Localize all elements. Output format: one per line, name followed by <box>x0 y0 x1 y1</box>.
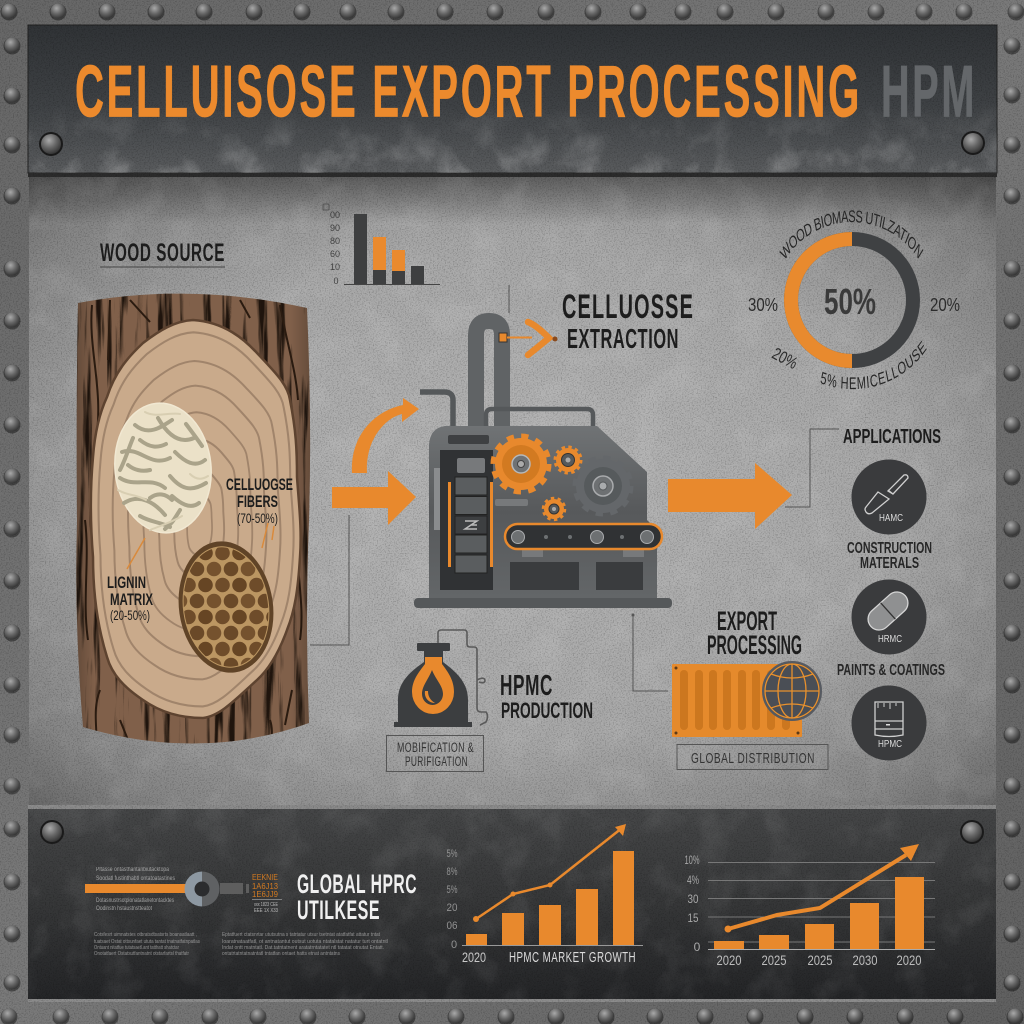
chart: forecast growth: 4% <box>687 873 699 887</box>
chart: HPMC market growth: 8% <box>446 866 458 878</box>
globe <box>763 662 821 720</box>
donut chart: wood biomass utilization <box>748 210 960 390</box>
box: modification and purification: MOBIFICATION & <box>397 740 474 755</box>
donut chart: wood biomass utilization: 5% HEMICELLOUSE <box>820 340 927 390</box>
connector: machine to applications <box>785 429 839 507</box>
application: paint bucket <box>852 686 926 760</box>
machine body <box>429 426 657 598</box>
tiny orange gear <box>543 498 565 520</box>
arrow: curved feed <box>352 398 419 473</box>
label: lignin matrix <box>107 538 153 623</box>
header panel <box>28 25 997 173</box>
label: construction materials: MATERALS <box>860 555 919 572</box>
footer: small gauge captions: Oodinstn hstaustnstteatot <box>96 906 152 912</box>
heading: cellulose extraction <box>562 288 694 354</box>
heading: HPMC production <box>500 670 593 723</box>
heading: HPMC production: PRODUCTION <box>501 698 593 723</box>
footer: small gauge captions <box>96 867 175 912</box>
application: paint bucket: HPMC <box>878 739 902 750</box>
heading: wood source: WOOD SOURCE <box>100 239 225 267</box>
donut chart: wood biomass utilization: 30% <box>748 295 778 315</box>
heading: cellulose extraction: CELLUOSSE <box>562 288 694 326</box>
pipes <box>420 321 593 428</box>
footer: fine print right: Indat ontt matntatl. Dat.tatntatnent aratatrntatatet ntl tatatat otnutat Entatt. <box>222 945 384 951</box>
small bar chart: 60 <box>330 249 340 259</box>
footer: fine print left: Ontuant nitatfue tutatsaetl.ant tatthatt shatctar <box>94 945 179 951</box>
chart: HPMC market growth: 0 <box>451 939 457 951</box>
footer: utilisation gauge bar: EEKNIE <box>252 873 278 882</box>
label: cellulose fibers: FIBERS <box>237 492 278 511</box>
footer: fine print left: tuatsaet Ostat ottsunfaet ututa tantat tnatnatfatnpatlas <box>94 939 200 945</box>
chart: forecast growth <box>684 844 935 968</box>
chart: HPMC market growth <box>446 824 643 966</box>
chart: HPMC market growth: 20 <box>446 902 458 914</box>
chart: forecast growth: 2025 <box>762 952 787 968</box>
heading: cellulose extraction: EXTRACTION <box>567 323 679 354</box>
chart: forecast growth: 15 <box>688 911 699 925</box>
small bar chart: 10 <box>330 262 340 272</box>
arrow: wood to machine <box>332 471 416 525</box>
small bar chart: 00 <box>330 210 340 220</box>
connector: trunk to process <box>310 515 349 645</box>
cellulose extraction machine <box>414 321 672 608</box>
footer: fine print right: ontatrtatntatnatntatl tntatfan ontaet hatts etnat antntatns <box>222 951 340 957</box>
application: construction materials <box>852 460 926 534</box>
conveyor belt <box>505 524 662 557</box>
label: lignin matrix: LIGNIN <box>107 573 146 592</box>
box: modification and purification: PURIFIGATION <box>405 754 468 769</box>
footer: small gauge captions: Dotasnustrsotplonatatlanetontacktes <box>96 898 174 904</box>
box: global distribution <box>677 744 828 770</box>
footer: utilisation gauge bar: 1E6JJ9 <box>252 890 279 899</box>
footer: fine print left <box>94 932 200 957</box>
wood trunk cross-section <box>76 294 310 744</box>
footer: fine print left: Onotatfaert Ostatsutfantnatnt otstarfartsl thatfatr <box>94 951 189 957</box>
chart: forecast growth: 2020 <box>716 952 742 968</box>
application: paints and coatings pill: HRMC <box>878 634 902 645</box>
box: global distribution: GLOBAL DISTRIBUTION <box>691 750 815 767</box>
footer: fine print left: Cotsfesrt uimnatstes otbratsdtsatsrts boansatlaatt , <box>94 932 197 938</box>
label: construction materials: CONSTRUCTION <box>847 540 932 557</box>
base windows <box>510 562 579 590</box>
chart: forecast growth: 2030 <box>852 952 878 968</box>
heading: export processing <box>707 606 802 660</box>
footer: utilisation gauge bar: xxx 1823 CEE <box>254 902 278 908</box>
footer: small gauge captions: Soodatl fustinthabtl ontatoatastines <box>96 876 175 882</box>
gray gear <box>575 458 631 514</box>
footer: fine print right <box>222 932 388 957</box>
footer: small gauge captions: Pltasse ontasthantanbiutacktopa <box>96 867 170 873</box>
donut chart: wood biomass utilization: 20% <box>769 344 801 373</box>
box: modification and purification <box>386 736 484 772</box>
footer: utilisation gauge bar: EEE 1X X33 <box>254 908 278 914</box>
footer: fine print right: Ioaratnataatfatl, ot antnatantut outsut uotuta ntatalstat natatur turt ontatntl <box>222 939 388 945</box>
footer: utilisation gauge bar: 1A6J13 <box>252 882 279 891</box>
label: lignin matrix: (20-50%) <box>110 607 150 623</box>
chart: forecast growth: 30 <box>688 892 699 906</box>
footer heading: global hprc utilkese <box>297 869 417 925</box>
small bar chart: 90 <box>330 223 340 233</box>
icon: shipping container with globe <box>672 662 821 737</box>
label: cellulose fibers <box>226 475 293 548</box>
application: construction materials: HAMC <box>879 513 903 524</box>
footer heading: global hprc utilkese: GLOBAL HPRC <box>297 869 417 899</box>
extraction outlet icon <box>499 285 558 355</box>
chart: HPMC market growth: 5% <box>446 848 458 860</box>
chart: HPMC market growth: 5% <box>446 884 458 896</box>
label: cellulose fibers: (70-50%) <box>237 510 278 526</box>
small bar chart: 0 <box>333 276 339 286</box>
label: cellulose fibers: CELLUOGSE <box>226 475 293 494</box>
footer heading: global hprc utilkese: UTILKESE <box>297 895 380 925</box>
large orange gear <box>493 436 549 492</box>
application: paints and coatings pill <box>852 580 926 654</box>
label: construction materials <box>847 540 932 572</box>
lignin honeycomb oval <box>178 541 274 673</box>
chart: forecast growth: 2020 <box>896 952 922 968</box>
heading: export processing: PROCESSING <box>707 630 802 660</box>
small bar chart <box>323 204 440 286</box>
label: lignin matrix: MATRIX <box>110 590 153 609</box>
main concrete panel <box>29 174 996 806</box>
chart: forecast growth: 2025 <box>808 952 833 968</box>
donut chart: wood biomass utilization: 20% <box>930 295 960 315</box>
cellulose fibre oval <box>108 398 218 538</box>
chart: forecast growth: 0 <box>694 940 701 954</box>
footer: utilisation gauge bar <box>85 872 282 914</box>
chart: forecast growth: 10% <box>684 853 700 867</box>
small bar chart: 80 <box>330 236 340 246</box>
bark <box>76 294 310 744</box>
footer panel <box>28 809 996 999</box>
heading: wood source <box>100 239 225 267</box>
arrow: machine to applications <box>668 463 792 529</box>
heading: HPMC production: HPMC <box>500 670 553 702</box>
heading: export processing: EXPORT <box>717 606 777 636</box>
left chamber <box>434 450 493 590</box>
donut chart: wood biomass utilization: WOOD BIOMASS UTILZATION <box>779 210 924 258</box>
label: paints and coatings: PAINTS & COATINGS <box>837 662 945 679</box>
footer: fine print right: Eptatfuert ctatsnrtar ututsutna s tatrtatur utsur tsetntat atatfatfat attatur tntat <box>222 932 380 938</box>
chart: HPMC market growth: 06 <box>446 920 458 932</box>
chart: HPMC market growth: 2020 <box>462 949 486 965</box>
small orange gear <box>555 447 581 473</box>
chart: HPMC market growth: HPMC MARKET GROWTH <box>509 949 636 966</box>
icon: HPMC production flask <box>394 630 488 727</box>
donut chart: wood biomass utilization: 50% <box>824 281 876 322</box>
cut wood face with growth rings <box>91 320 301 718</box>
connector: machine to export <box>632 614 668 691</box>
heading: applications: APPLICATIONS <box>843 426 941 448</box>
